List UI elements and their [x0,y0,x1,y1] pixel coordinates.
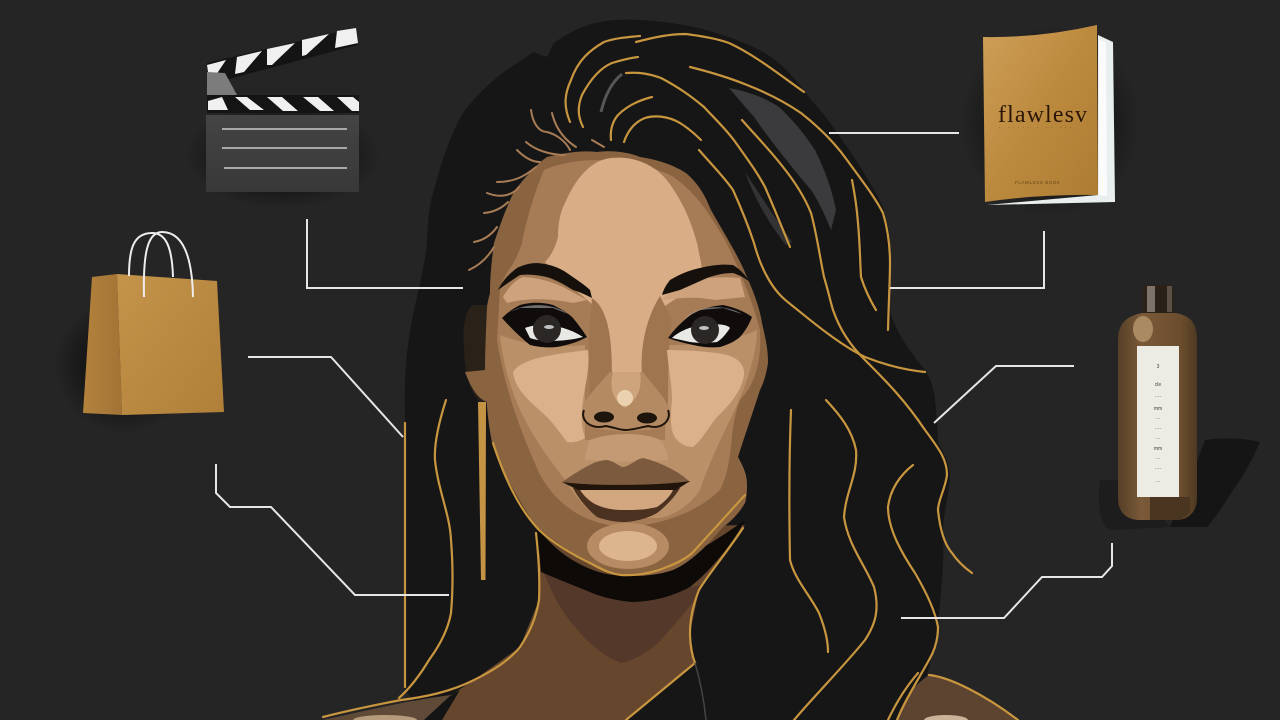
eyebrow right [662,265,750,295]
hinge [207,72,237,98]
cheek highlight left [513,350,588,442]
label text: cle [1155,382,1161,388]
eyebrow left [498,263,592,298]
body [1118,313,1197,520]
label text [1154,364,1162,485]
label text: mm [1154,446,1162,452]
label text: 3 [1157,364,1160,370]
right shoulder [897,675,1018,720]
earring [478,402,486,580]
slate body [206,115,359,192]
lower midface [585,434,668,462]
connector lines [216,133,1112,618]
book title: flawlesv [998,102,1087,128]
left shoulder [323,695,451,720]
portrait [323,20,1018,720]
hair sheen strip [745,172,792,245]
neck mid shade [541,565,700,663]
cheek highlight right [667,350,744,447]
under-brow right [662,277,745,300]
bag side [83,274,122,415]
icon: shopping bag [55,232,224,433]
thin gray hair strand [695,663,706,720]
neck [440,525,745,720]
label text: ··· [1156,436,1161,442]
pages [987,35,1115,205]
handles [129,232,193,297]
label text: ··· [1156,479,1161,485]
chin patch [587,523,669,569]
label text: ···· [1155,466,1162,472]
clapper arm [207,28,358,82]
lips [562,458,690,522]
icon: book [960,25,1140,218]
neck black shadow [537,520,745,602]
hair sheen [729,88,836,230]
right shoulder highlight [924,715,968,720]
clapper bar [207,95,359,113]
eye right [668,305,752,347]
gold hair strands [323,34,1018,720]
cap [1143,285,1173,313]
nose side shadow right [642,296,672,410]
icon: clapperboard [185,28,381,209]
bag front [117,274,224,415]
cheek and mouth tone [500,330,757,518]
hair sheen arc [601,74,622,112]
label text: ···· [1155,426,1162,432]
hair back mass [405,20,950,720]
face base [485,151,768,576]
tan hairline wisps [469,110,604,270]
icon: bottle [1099,285,1260,530]
forehead and nose highlight [545,158,704,375]
under-brow left [503,277,587,303]
icon: book: FLAWLESS BOOK [1015,180,1060,185]
label text: ··· [1156,416,1161,422]
label text: ···· [1155,394,1162,400]
label text: mm [1154,406,1162,412]
eye left [502,303,587,347]
label text: ··· [1156,456,1161,462]
left shoulder highlight [353,715,417,720]
face mid tone [497,160,760,527]
nose side shadow left [589,298,612,405]
label [1137,346,1179,497]
nose [582,372,670,432]
ear [463,305,495,405]
bottle shadow [1170,438,1260,527]
cover [983,25,1098,202]
shoulder strap [424,690,460,720]
icon: book: · ····· · ·· ··· [999,125,1071,131]
